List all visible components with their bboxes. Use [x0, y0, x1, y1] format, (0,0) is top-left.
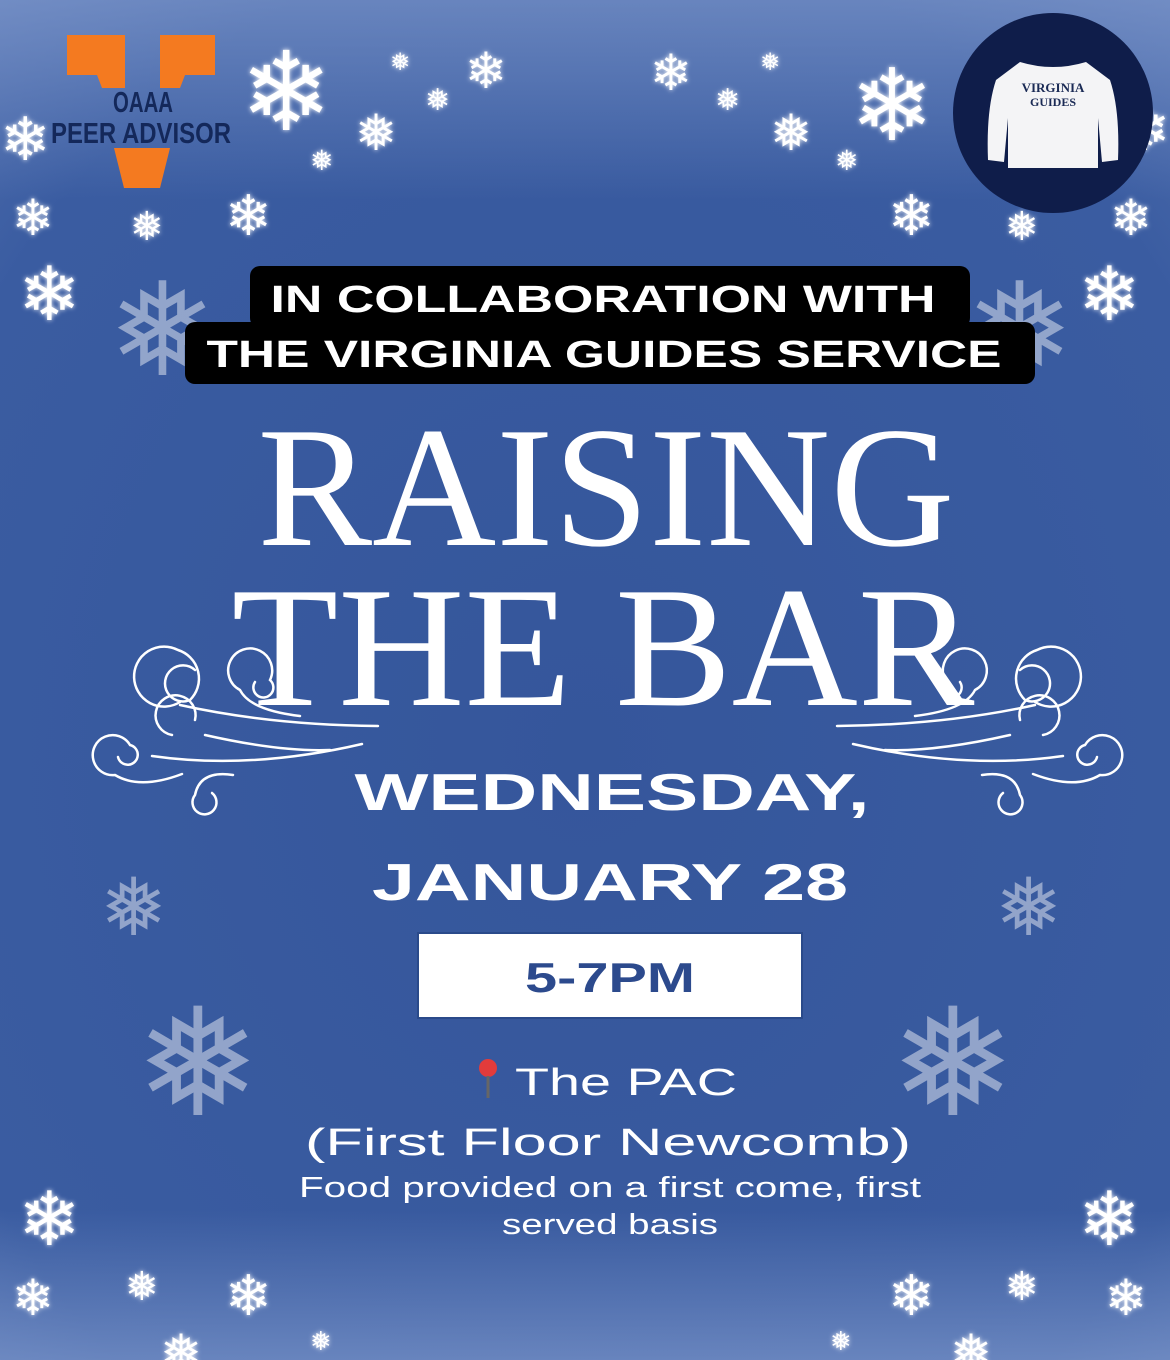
snowflakes decoration: ❅ [355, 104, 397, 162]
snowflakes decoration: ❄ [225, 1264, 272, 1329]
snowflakes decoration: ❄ [1110, 189, 1152, 247]
snowflakes decoration: ❅ [715, 83, 740, 118]
location: served basis [502, 1209, 718, 1241]
snowflakes decoration: ❄ [1078, 250, 1141, 338]
logo: virginia guides sweatshirt: GUIDES [1030, 95, 1076, 109]
location [299, 1059, 921, 1241]
date: WEDNESDAY, [354, 764, 870, 822]
snowflakes decoration: ❄ [18, 1175, 81, 1263]
snowflakes decoration: ❅ [835, 144, 858, 177]
snowflakes decoration: ❅ [425, 83, 450, 118]
swirls right [837, 647, 1122, 814]
snowflakes decoration: ❄ [1120, 95, 1170, 165]
logo: virginia guides sweatshirt: VIRGINIA [1022, 80, 1085, 95]
snowflakes decoration: ❄ [1078, 1175, 1141, 1263]
snowflakes decoration: ❄ [18, 250, 81, 338]
snowflakes decoration: ❅ [130, 204, 164, 250]
collaboration banner [185, 266, 1035, 384]
large faint snowflakes mid: ❅ [135, 977, 261, 1151]
snowflakes decoration: ❄ [12, 189, 54, 247]
snowflakes decoration: ❄ [850, 47, 934, 164]
snowflakes decoration: ❅ [390, 48, 410, 76]
snowflakes decoration: ❅ [1005, 204, 1039, 250]
date: JANUARY 28 [372, 854, 848, 912]
icon: pin [479, 1059, 497, 1098]
collaboration banner: THE VIRGINIA GUIDES SERVICE [206, 334, 1002, 376]
snowflakes decoration: ❅ [1005, 1264, 1039, 1310]
snowflakes decoration: ❅ [830, 1327, 852, 1357]
large faint snowflakes mid: ❅ [890, 977, 1016, 1151]
title [232, 393, 975, 743]
collaboration banner: IN COLLABORATION WITH [270, 279, 936, 321]
large faint snowflakes mid: ❅ [995, 861, 1062, 954]
snowflakes decoration: ❅ [310, 144, 333, 177]
snowflakes decoration: ❄ [225, 184, 272, 249]
logo: virginia guides sweatshirt [953, 13, 1153, 213]
large faint snowflakes mid [100, 254, 1074, 1151]
snowflakes decoration: ❅ [310, 1327, 332, 1357]
snowflakes decoration: ❄ [1105, 1269, 1147, 1327]
swirls left [93, 647, 378, 814]
large faint snowflakes mid: ❅ [100, 861, 167, 954]
location: The PAC [515, 1062, 737, 1104]
snowflakes decoration: ❄ [12, 1269, 54, 1327]
snowflakes decoration: ❄ [0, 105, 50, 175]
snowflakes decoration: ❄ [888, 1264, 935, 1329]
title: THE BAR [232, 553, 975, 743]
snowflakes decoration: ❄ [888, 184, 935, 249]
title: RAISING [258, 393, 954, 583]
snowflakes decoration: ❅ [125, 1264, 159, 1310]
large faint snowflakes mid: ❅ [965, 254, 1074, 406]
snowflakes decoration: ❅ [770, 104, 812, 162]
location: (First Floor Newcomb) [305, 1122, 911, 1164]
snowflakes decoration: ❄ [465, 42, 507, 100]
snowflakes decoration: ❅ [760, 48, 780, 76]
logo: OAAA peer advisor [51, 35, 231, 188]
snowflakes decoration: ❄ [240, 28, 332, 156]
logo: OAAA peer advisor: OAAA [113, 87, 173, 119]
snowflakes decoration: ❄ [650, 44, 692, 102]
time box [418, 933, 802, 1018]
date [354, 764, 870, 912]
time box: 5-7PM [525, 954, 695, 1001]
logo: OAAA peer advisor: PEER ADVISOR [51, 118, 231, 150]
large faint snowflakes mid: ❅ [108, 254, 217, 406]
location: Food provided on a first come, first [299, 1172, 921, 1204]
